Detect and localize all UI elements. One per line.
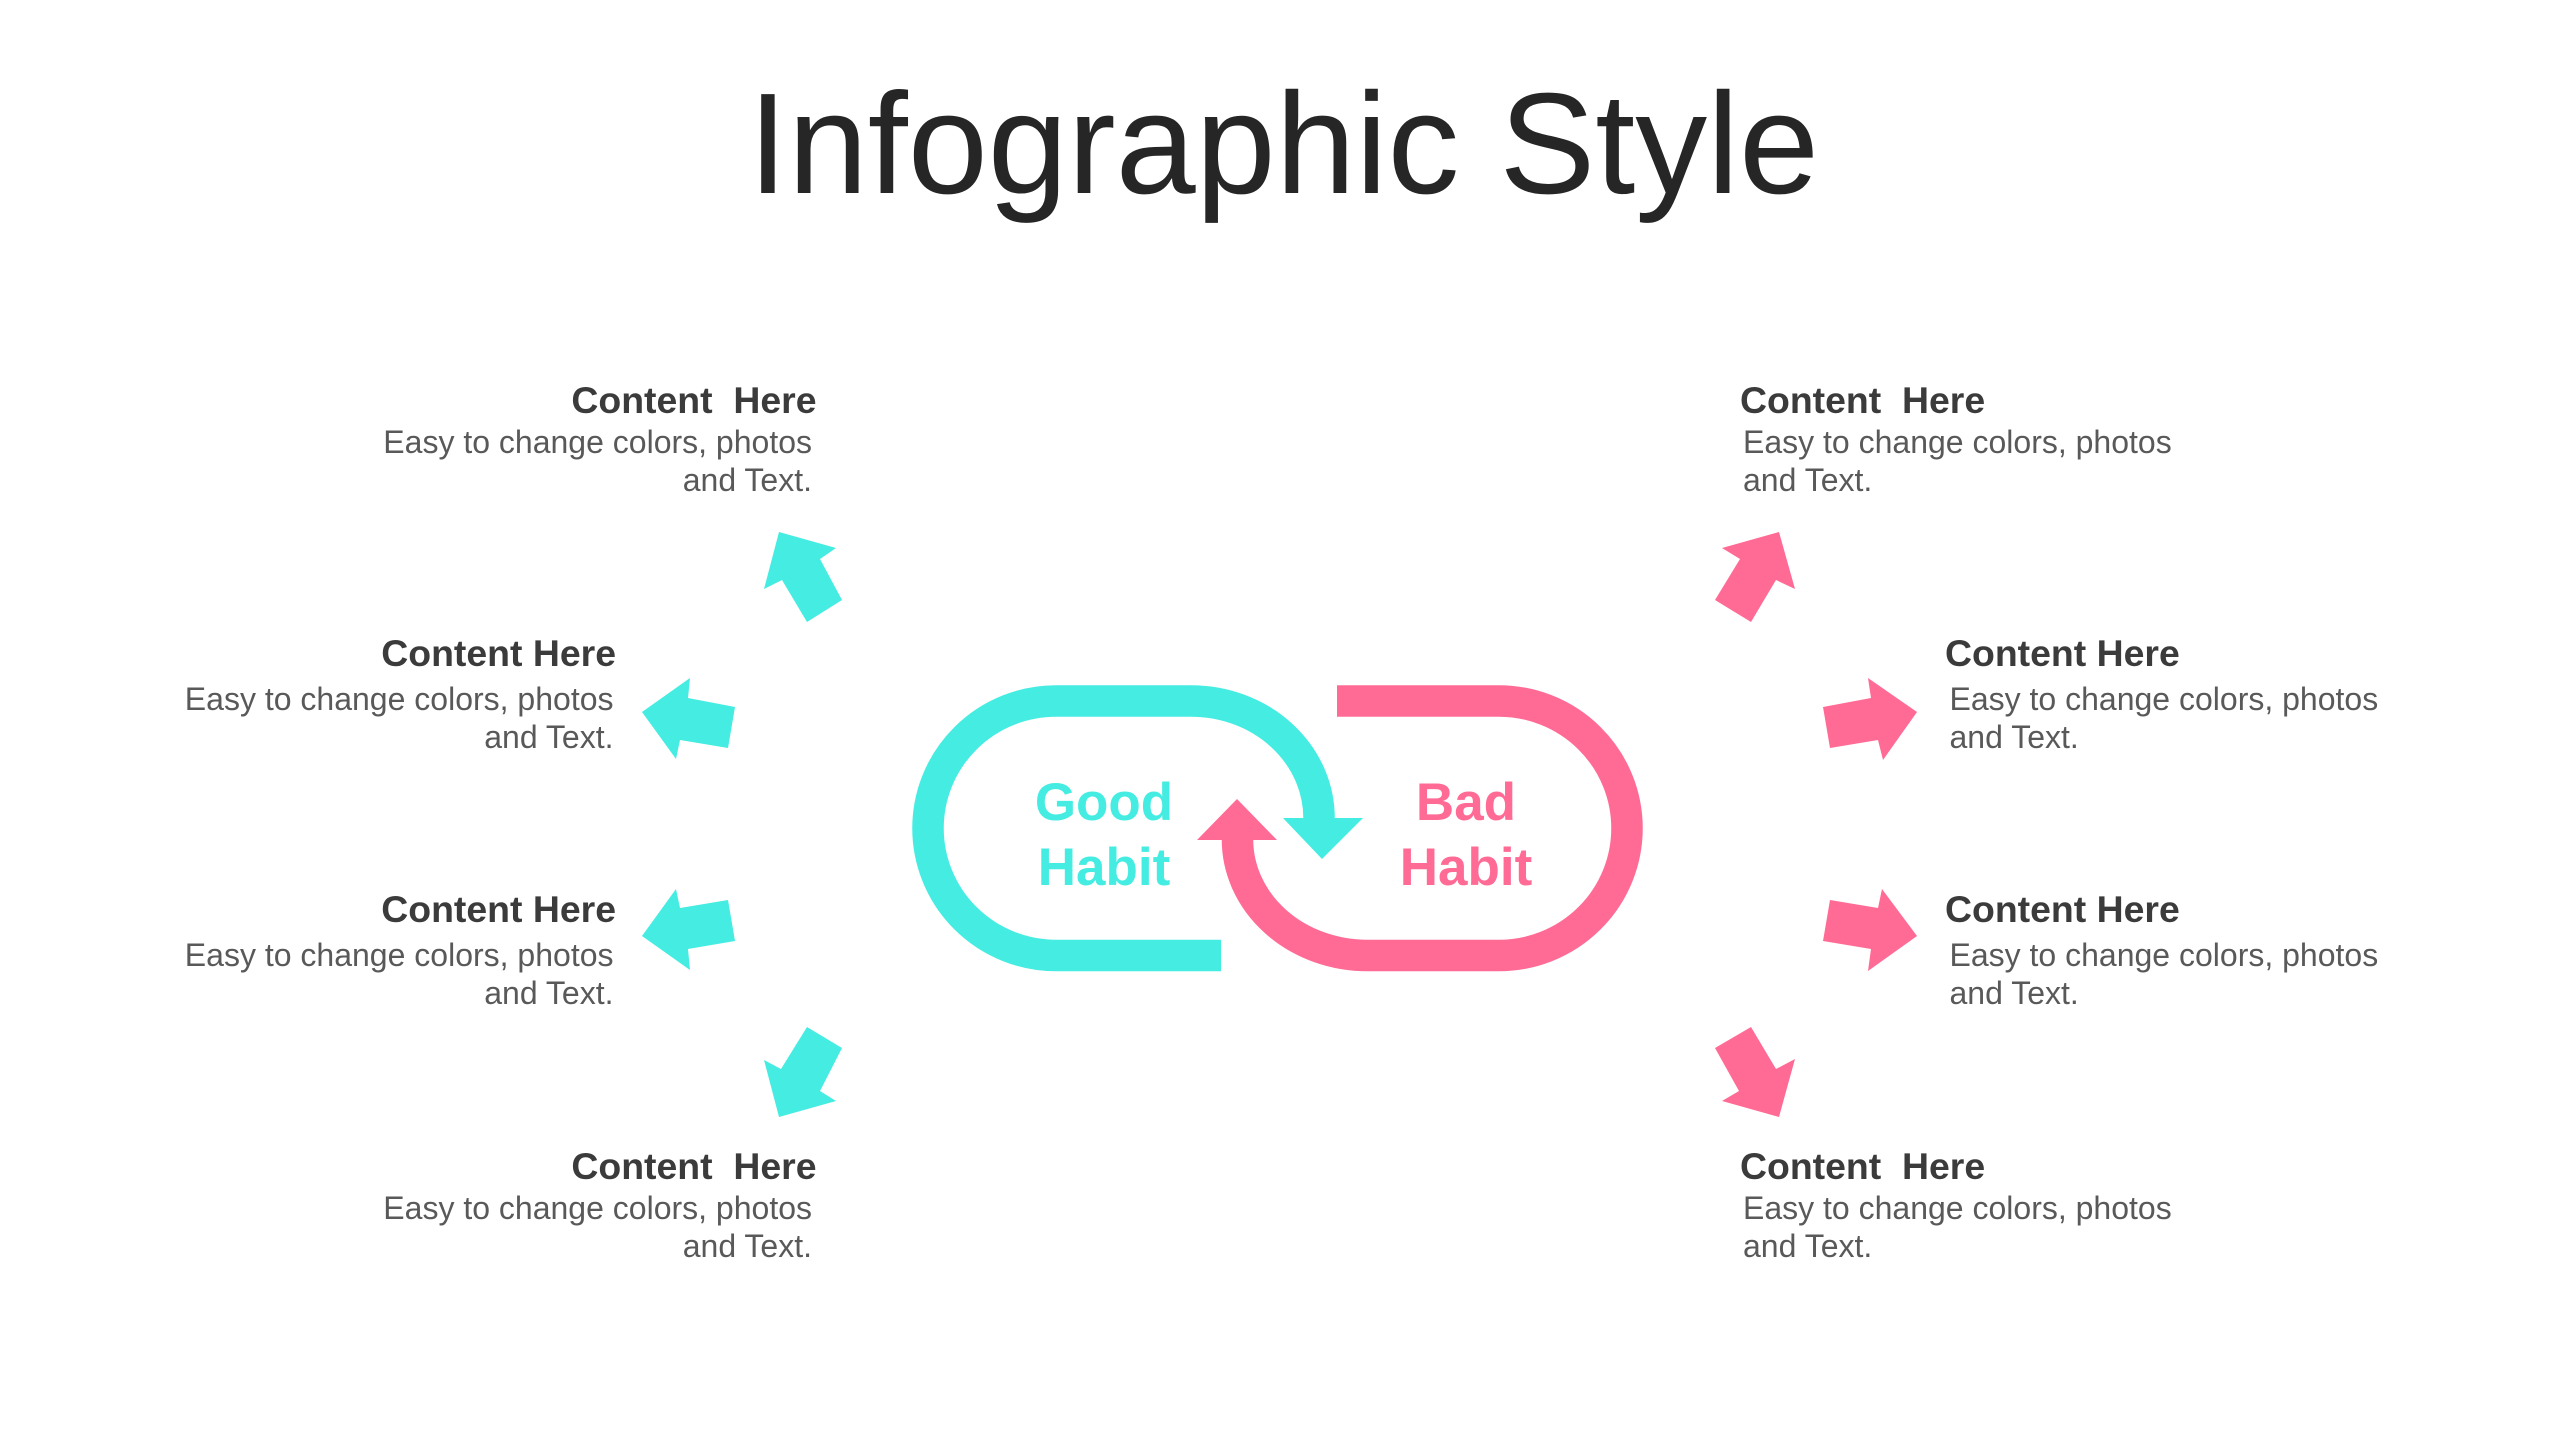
text block: lower middle right [1945,888,2378,1011]
text block: upper middle left [185,632,616,755]
text block: upper middle left: Content Here [381,632,616,674]
text block: top right: Content Here [1740,379,1985,421]
label: good habit: Habit [1038,838,1170,897]
text block: bottom right [1740,1145,2172,1264]
text block: bottom left [383,1145,816,1264]
label: good habit: Good [1035,773,1173,832]
text block: lower middle right: Content Here [1945,888,2180,930]
text block: upper middle left: Easy to change colors, photos [185,681,614,717]
text block: upper middle right [1945,632,2378,755]
text block: lower middle left: and Text. [484,975,614,1011]
text block: lower middle right: and Text. [1950,975,2079,1011]
text block: upper middle left: and Text. [484,719,614,755]
loop: bad habit (pink) [1197,701,1627,956]
text block: top left: and Text. [683,462,812,498]
arrow: top right [1715,532,1795,622]
arrow: upper middle right [1823,678,1917,760]
text block: upper middle right: Content Here [1945,632,2180,674]
text block: bottom right: and Text. [1743,1228,1872,1264]
text block: lower middle right: Easy to change colors, photos [1950,937,2378,973]
text block: top right: and Text. [1743,462,1872,498]
label: bad habit: Bad [1416,773,1516,832]
text block: lower middle left: Content Here [381,888,616,930]
text block: top right [1740,379,2172,498]
text block: upper middle right: and Text. [1950,719,2079,755]
text block: top left: Content Here [571,379,816,421]
loop: good habit (teal) [928,701,1363,956]
text block: upper middle right: Easy to change colors, photos [1950,681,2378,717]
arrow: top left [764,532,842,622]
text block: bottom right: Easy to change colors, photos [1743,1190,2172,1226]
text block: bottom left: Easy to change colors, photos [383,1190,812,1226]
arrow: lower middle left [642,889,735,970]
arrow: lower middle right [1823,889,1917,971]
text block: bottom left: and Text. [683,1228,812,1264]
text block: lower middle left [185,888,616,1011]
text block: top left [383,379,816,498]
arrow: upper middle left [642,678,735,759]
text block: bottom right: Content Here [1740,1145,1985,1187]
diagram: habit loop [928,701,1627,956]
text block: bottom left: Content Here [571,1145,816,1187]
title: Infographic Style [748,64,1819,224]
text block: lower middle left: Easy to change colors, photos [185,937,614,973]
text block: top right: Easy to change colors, photos [1743,424,2172,460]
arrow: bottom left [764,1027,842,1117]
label: bad habit: Habit [1400,838,1532,897]
arrow: bottom right [1715,1027,1795,1117]
text block: top left: Easy to change colors, photos [383,424,812,460]
